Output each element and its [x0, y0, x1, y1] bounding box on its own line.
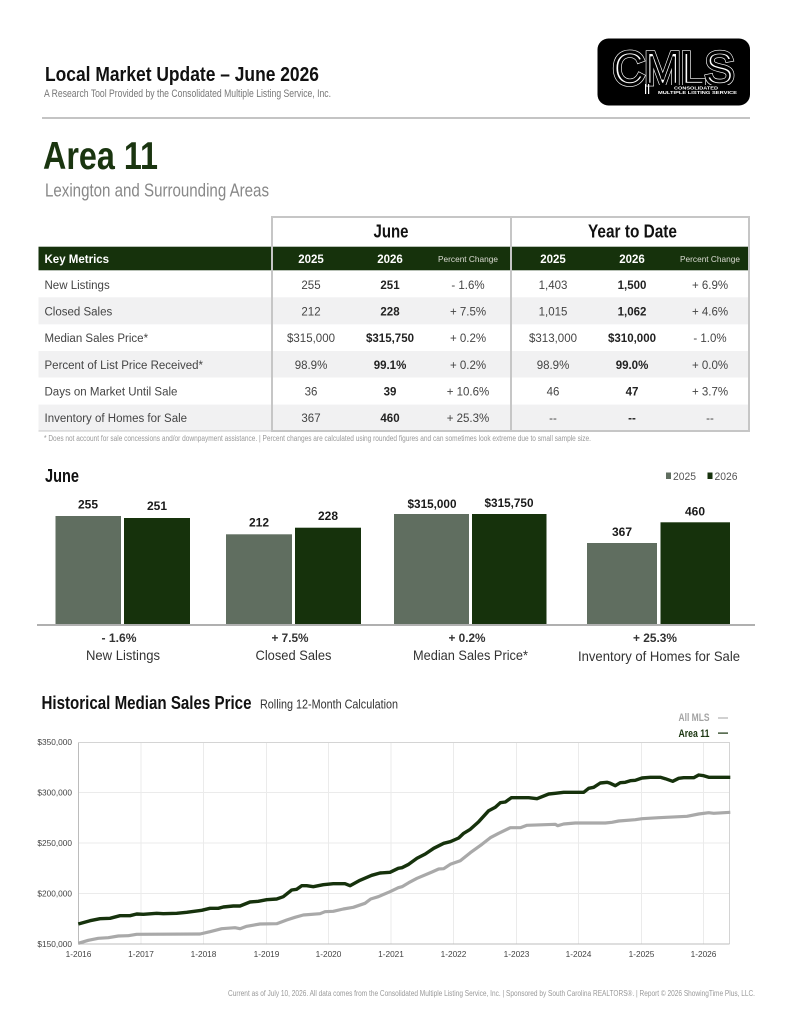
row: Median Sales Price: - 1.0% — [693, 333, 727, 345]
legend: years: 2025 — [673, 471, 696, 483]
row: Percent of List Price Received: 99.0% — [616, 360, 648, 372]
x axis labels: 1-2018 — [191, 949, 217, 959]
row: Median Sales Price: $315,000 — [287, 333, 335, 345]
row: Median Sales Price: Median Sales Price* — [44, 333, 149, 345]
row: Days on Market Until Sale: 46 — [547, 386, 559, 398]
table header row: 2025 — [298, 254, 324, 266]
row: New Listings: + 6.9% — [692, 280, 728, 292]
row: New Listings: 251 — [380, 280, 400, 292]
table header row: Key Metrics — [44, 254, 109, 266]
x axis labels: 1-2025 — [629, 949, 655, 959]
row: New Listings — [44, 280, 728, 292]
legend: years: 2026 — [714, 471, 738, 483]
row: New Listings: - 1.6% — [451, 280, 485, 292]
subtitle: A Research Tool Provided by the Consolidated Multiple Listing Service, Inc. — [44, 88, 331, 100]
row: Inventory of Homes for Sale: -- — [706, 413, 714, 425]
x axis labels: 1-2024 — [566, 949, 592, 959]
row: Inventory of Homes for Sale: Inventory of Homes for Sale — [44, 413, 187, 425]
subheading: rolling calculation: Rolling 12-Month Calculation — [260, 698, 398, 712]
row: Inventory of Homes for Sale: 460 — [380, 413, 400, 425]
y axis labels: $150,000 — [37, 939, 72, 949]
area heading: Area 11 — [43, 135, 158, 178]
area subheading: Lexington and Surrounding Areas — [45, 180, 269, 200]
logo: CMLS — [598, 38, 750, 106]
x axis labels: 1-2017 — [128, 949, 154, 959]
title: Local Market Update – June 2026 — [45, 63, 319, 86]
row: Closed Sales: 1,015 — [539, 306, 567, 318]
bars: Closed Sales: Closed Sales — [256, 647, 332, 663]
bars: New Listings: New Listings — [86, 647, 160, 663]
bars: Median Sales Price: $315,000 — [408, 497, 457, 511]
legend: years — [666, 471, 738, 483]
row: Days on Market Until Sale: + 3.7% — [692, 386, 728, 398]
y axis labels: $200,000 — [37, 888, 72, 898]
table header row: Percent Change — [438, 254, 498, 264]
row: Days on Market Until Sale — [44, 386, 728, 398]
table header row: 2026 — [377, 254, 403, 266]
bars: Closed Sales: 228 — [318, 509, 338, 523]
x axis labels: 1-2022 — [441, 949, 467, 959]
bars: Inventory of Homes for Sale: Inventory of Homes for Sale — [578, 648, 740, 664]
line: Area 11 — [78, 775, 730, 924]
bars: Closed Sales: 212 — [249, 516, 269, 530]
row: Closed Sales: Closed Sales — [44, 306, 113, 318]
row: Days on Market Until Sale: + 10.6% — [447, 386, 489, 398]
line chart: historical median sales price — [37, 737, 730, 959]
row: Inventory of Homes for Sale: -- — [549, 413, 557, 425]
row: New Listings: 1,500 — [618, 280, 646, 292]
panel: key metrics table — [38, 217, 749, 432]
row: Inventory of Homes for Sale: -- — [628, 413, 636, 425]
bar chart: June comparison — [37, 496, 755, 664]
row: Closed Sales — [44, 306, 728, 318]
y axis labels — [37, 737, 72, 949]
row: New Listings: 255 — [301, 280, 321, 292]
table period headings — [374, 220, 677, 242]
legend: line series: Area 11 — [678, 728, 710, 740]
y axis labels: $350,000 — [37, 737, 72, 747]
bars: New Listings: - 1.6% — [102, 631, 137, 645]
row: Days on Market Until Sale: 36 — [305, 386, 317, 398]
bars: Closed Sales: + 7.5% — [272, 631, 309, 645]
row: Closed Sales: 1,062 — [618, 306, 646, 318]
row: Days on Market Until Sale: Days on Market Until Sale — [44, 386, 177, 398]
table header row: 2025 — [540, 254, 566, 266]
x axis labels: 1-2023 — [504, 949, 530, 959]
logo: CMLS: CMLS — [613, 43, 734, 94]
y axis labels: $300,000 — [37, 788, 72, 798]
row: Median Sales Price: $310,000 — [608, 333, 656, 345]
row: Closed Sales: + 7.5% — [450, 306, 486, 318]
bars: New Listings: 251 — [147, 499, 167, 513]
row: Median Sales Price: + 0.2% — [450, 333, 486, 345]
row: Closed Sales: 228 — [380, 306, 400, 318]
table header row: Percent Change — [680, 254, 740, 264]
x axis labels: 1-2016 — [66, 949, 92, 959]
row: Percent of List Price Received: 98.9% — [537, 360, 569, 372]
header: report title — [44, 63, 331, 100]
row: Median Sales Price — [44, 333, 727, 345]
logo: CMLS: CMLS — [613, 43, 734, 94]
logo: CMLS: CMLS — [613, 43, 734, 94]
x axis labels — [66, 949, 717, 959]
row: Median Sales Price: $313,000 — [529, 333, 577, 345]
table header row: 2026 — [619, 254, 645, 266]
row: Inventory of Homes for Sale: 367 — [301, 413, 321, 425]
row: New Listings: 1,403 — [539, 280, 567, 292]
row: Percent of List Price Received — [44, 360, 728, 372]
bars: Inventory of Homes for Sale: 460 — [685, 504, 705, 518]
row: Percent of List Price Received: + 0.0% — [692, 360, 728, 372]
row: Median Sales Price: $315,750 — [366, 333, 414, 345]
x axis labels: 1-2020 — [316, 949, 342, 959]
table period headings: June — [374, 220, 408, 242]
bars: Closed Sales — [226, 509, 361, 663]
row: Percent of List Price Received: Percent of List Price Received* — [44, 360, 204, 372]
bars: Median Sales Price: Median Sales Price* — [413, 647, 529, 663]
row: Inventory of Homes for Sale: + 25.3% — [447, 413, 489, 425]
row: Percent of List Price Received: 99.1% — [374, 360, 406, 372]
x axis labels: 1-2026 — [691, 949, 717, 959]
legend: line series: All MLS — [678, 712, 710, 724]
y axis labels: $250,000 — [37, 838, 72, 848]
bars: Median Sales Price: + 0.2% — [448, 631, 486, 645]
x axis labels: 1-2019 — [254, 949, 280, 959]
table footnote: * Does not account for sale concessions and/or downpayment assistance. | Percent changes are calculated using rounded figures and can sometimes look extreme due to small sample size. — [44, 434, 591, 443]
logo: CMLS: CONSOLIDATED — [674, 86, 719, 92]
table period headings: Year to Date — [588, 220, 677, 242]
row: New Listings: New Listings — [44, 280, 110, 292]
row: Closed Sales: 212 — [301, 306, 321, 318]
line: All MLS — [78, 812, 730, 943]
bars: Inventory of Homes for Sale — [578, 504, 740, 664]
row: Percent of List Price Received: 98.9% — [295, 360, 327, 372]
heading: historical median sales price: Historical Median Sales Price — [42, 693, 252, 713]
bars: Median Sales Price: $315,750 — [484, 496, 534, 510]
table header row — [44, 254, 740, 266]
bars: New Listings — [56, 498, 190, 663]
row: Percent of List Price Received: + 0.2% — [450, 360, 486, 372]
logo: CMLS: MULTIPLE LISTING SERVICE — [658, 90, 738, 96]
x axis labels: 1-2021 — [378, 949, 404, 959]
bars: Inventory of Homes for Sale: 367 — [612, 525, 632, 539]
legend: line series — [678, 712, 728, 740]
heading: June charts: June — [45, 466, 79, 486]
bars: Median Sales Price — [394, 496, 546, 663]
row: Inventory of Homes for Sale — [44, 413, 714, 425]
bars: New Listings: 255 — [78, 498, 98, 512]
row: Closed Sales: + 4.6% — [692, 306, 728, 318]
bars: Inventory of Homes for Sale: + 25.3% — [633, 631, 677, 645]
row: Days on Market Until Sale: 39 — [384, 386, 396, 398]
row: Days on Market Until Sale: 47 — [626, 386, 638, 398]
